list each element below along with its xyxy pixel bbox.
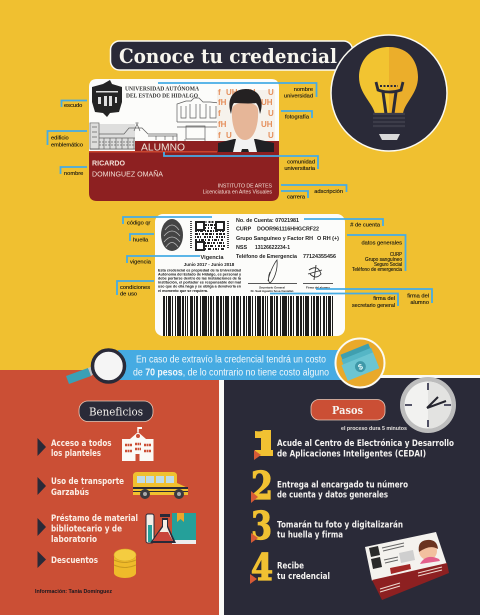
labels: front of credential (48, 83, 346, 200)
step 3: 3 (251, 503, 272, 548)
label: # de cuenta: # de cuenta (350, 222, 381, 228)
label: condiciones de uso: de uso (120, 292, 137, 298)
title: Conoce tu credencial (119, 44, 337, 68)
icon: lab flask and book (146, 513, 196, 544)
label: código qr (123, 217, 212, 226)
label: # de cuenta (304, 219, 383, 228)
account data: 13126622234-1 (255, 245, 290, 251)
photo: student: f (218, 109, 221, 118)
panel: credential back (155, 214, 345, 336)
icon: money (336, 338, 384, 388)
badge: ALUMNO (89, 141, 217, 154)
photo: student: fH (218, 120, 227, 129)
benefit: bus transport: Garzabús (51, 488, 89, 498)
label: fotografía (281, 111, 312, 120)
validity (184, 255, 235, 267)
note: process duration: el proceso dura 5 minutos (341, 426, 407, 432)
photo: student: UH (261, 98, 273, 107)
account data: NSS (236, 245, 247, 251)
step 2 (251, 463, 408, 508)
label: datos generales: Teléfono de emergencia (352, 267, 403, 273)
terms of use: Autónoma del Estado de Hidalgo, es personal y (158, 272, 242, 276)
signature: general secretary (248, 260, 297, 293)
university name: DEL ESTADO DE HIDALGO (126, 94, 198, 100)
label: edificio emblemático: edificio (51, 136, 69, 142)
label: huella (130, 234, 154, 244)
building illustration (90, 98, 219, 149)
terms of use: uso que de ella haga y se obliga a devolverla en (158, 284, 242, 288)
step 3: Tomarán tu foto y digitalizarán (277, 520, 403, 530)
label: datos generales: Grupo sanguíneo (365, 257, 402, 263)
labels: back of credential (117, 217, 432, 309)
label: nombre universidad (158, 83, 316, 100)
label: vigencia: vigencia (130, 260, 152, 266)
step 1 (254, 430, 454, 460)
benefit: campus access: Acceso a todos (51, 439, 112, 449)
label: carrera (281, 191, 308, 200)
heading: Pasos (311, 400, 385, 420)
terms of use: el momento que se requiera. (158, 288, 208, 293)
panel: steps background (224, 378, 480, 615)
label: adscripción (281, 185, 346, 195)
label: nombre: nombre (64, 171, 83, 177)
photo: student: U (268, 131, 274, 140)
label: vigencia (127, 256, 200, 266)
label: datos generales: Seguro Social (374, 262, 402, 268)
step 2: 2 (251, 463, 273, 508)
benefit: bus transport: Uso de transporte (51, 477, 124, 487)
signature: general secretary: Dr. Saúl Agustín Sosa Castelán (251, 289, 294, 293)
label: condiciones de uso: condiciones (120, 285, 150, 291)
icon: school bus (133, 472, 188, 499)
icon: clock (400, 377, 456, 433)
university name (125, 84, 200, 100)
terms of use: Esta credencial es propiedad de la Universidad (158, 268, 242, 272)
benefit: library and lab loans: laboratorio (51, 535, 97, 545)
label: código qr: código qr (127, 220, 151, 226)
label: nombre universidad: universidad (284, 94, 313, 100)
photo: student: UH (244, 88, 256, 97)
benefit: campus access: los planteles (51, 449, 101, 459)
label: carrera: carrera (287, 194, 306, 200)
callout: lost credential banner: de 70 pesos, de lo contrario no tiene costo alguno (133, 368, 329, 378)
account data: DOOR961116HHGCRF22 (257, 226, 319, 232)
terms of use: institución, el portador es responsable del mal (158, 280, 241, 284)
credit line: Información: Tania Domínguez (35, 589, 112, 595)
benefit: discounts: Descuentos (51, 556, 98, 566)
account data: No. de Cuenta: 07021981 (236, 218, 299, 224)
photo: student: fH (218, 98, 227, 107)
icon: fingerprint (161, 219, 183, 251)
signature: student: Firma del alumno (306, 286, 330, 290)
step 2: Entrega al encargado tu número (277, 480, 408, 490)
institute text: INSTITUTO DE ARTES (218, 184, 273, 190)
student name: RICARDO (92, 160, 126, 168)
account data: 77124355456 (303, 254, 336, 260)
photo: student: UH (261, 120, 273, 129)
benefit: bus transport (38, 472, 188, 499)
barcode (163, 296, 334, 336)
account data (236, 218, 339, 260)
signature: student (303, 265, 333, 290)
account data: O RH (+) (317, 236, 339, 242)
validity: Junio 2017 - Junio 2018 (184, 262, 235, 267)
illustration: finished credential cards (365, 532, 449, 600)
university name: UNIVERSIDAD AUTÓNOMA (125, 84, 200, 92)
label: adscripción: adscripción (314, 189, 343, 195)
panel: benefits background (0, 370, 219, 615)
step 4: Recibe (277, 562, 304, 572)
photo: student (217, 88, 279, 152)
label: edificio emblemático (48, 131, 87, 148)
icon: money: $ (357, 362, 365, 372)
terms of use (158, 268, 242, 293)
benefit: library and lab loans: Préstamo de material (51, 513, 138, 524)
icon: light bulb (331, 35, 447, 151)
benefit: library and lab loans (38, 513, 196, 545)
step 2: de cuenta y datos generales (277, 490, 388, 500)
label: comunidad universitaria (164, 152, 318, 172)
label: comunidad universitaria: universitaria (284, 166, 316, 172)
panel: credential front (89, 79, 279, 201)
label: nombre (60, 167, 87, 177)
label: edificio emblemático: emblemático (51, 142, 83, 148)
label: datos generales: CURP (390, 252, 402, 258)
benefit: library and lab loans: bibliotecario y de (51, 524, 122, 534)
label: escudo (62, 100, 87, 109)
label: condiciones de uso (117, 281, 154, 298)
step 4: 4 (251, 547, 273, 589)
label: datos generales (347, 235, 406, 273)
label: huella: huella (133, 238, 149, 244)
icon: school (122, 427, 154, 461)
institute text (203, 184, 273, 196)
label: firma del alumno: alumno (410, 300, 429, 306)
badge: ALUMNO: ALUMNO (141, 142, 185, 154)
account data: CURP (236, 226, 252, 232)
photo: student: U (268, 88, 274, 97)
label: nombre universidad: nombre (294, 87, 313, 93)
label: firma del alumno (316, 289, 432, 306)
icon: coins (114, 549, 136, 578)
icon: QR code (191, 221, 228, 251)
label: firma del secretario general: firma del (373, 296, 395, 302)
student name: DOMINGUEZ OMAÑA (92, 170, 163, 178)
label: fotografía: fotografía (285, 114, 310, 120)
step 3 (251, 503, 403, 548)
student name (92, 160, 163, 178)
heading: Beneficios (79, 401, 153, 422)
label: firma del alumno: firma del (407, 294, 429, 300)
callout: lost credential banner: En caso de extravío la credencial tendrá un costo (136, 354, 326, 366)
photo: student: U (226, 131, 232, 140)
step 3: tu huella y firma (277, 530, 343, 540)
photo: student: f (218, 131, 221, 140)
institute text: Licenciatura en Artes Visuales (203, 190, 272, 196)
benefit: campus access (38, 427, 154, 461)
label: escudo: escudo (64, 103, 82, 109)
callout: lost credential banner (118, 350, 342, 380)
benefit: discounts (38, 549, 136, 578)
icon: magnifying glass (66, 350, 124, 384)
step 4 (250, 547, 330, 589)
panel: white gutter (219, 370, 480, 615)
signature: general secretary: Secretario General (259, 286, 285, 290)
terms of use: debe portarse dentro de las instalaciones de la (158, 276, 242, 280)
label: firma del secretario general (270, 294, 398, 309)
label: datos generales: datos generales (362, 240, 402, 246)
account data: Grupo Sanguíneo y Factor RH (236, 236, 313, 242)
step 4: tu credencial (277, 572, 330, 582)
validity: Vigencia (201, 255, 224, 261)
account data: Teléfono de Emergencia (236, 254, 298, 260)
photo: student: f (218, 88, 221, 97)
label: comunidad universitaria: comunidad (287, 160, 315, 166)
photo: student: UH (226, 88, 238, 97)
label: firma del secretario general: secretario general (352, 303, 395, 309)
photo: student: U (268, 109, 274, 118)
heading: Pasos: Pasos (332, 403, 363, 417)
step 1: de Aplicaciones Inteligentes (CEDAI) (277, 450, 426, 460)
icon: university shield (92, 80, 122, 117)
heading: Beneficios: Beneficios (89, 406, 143, 418)
